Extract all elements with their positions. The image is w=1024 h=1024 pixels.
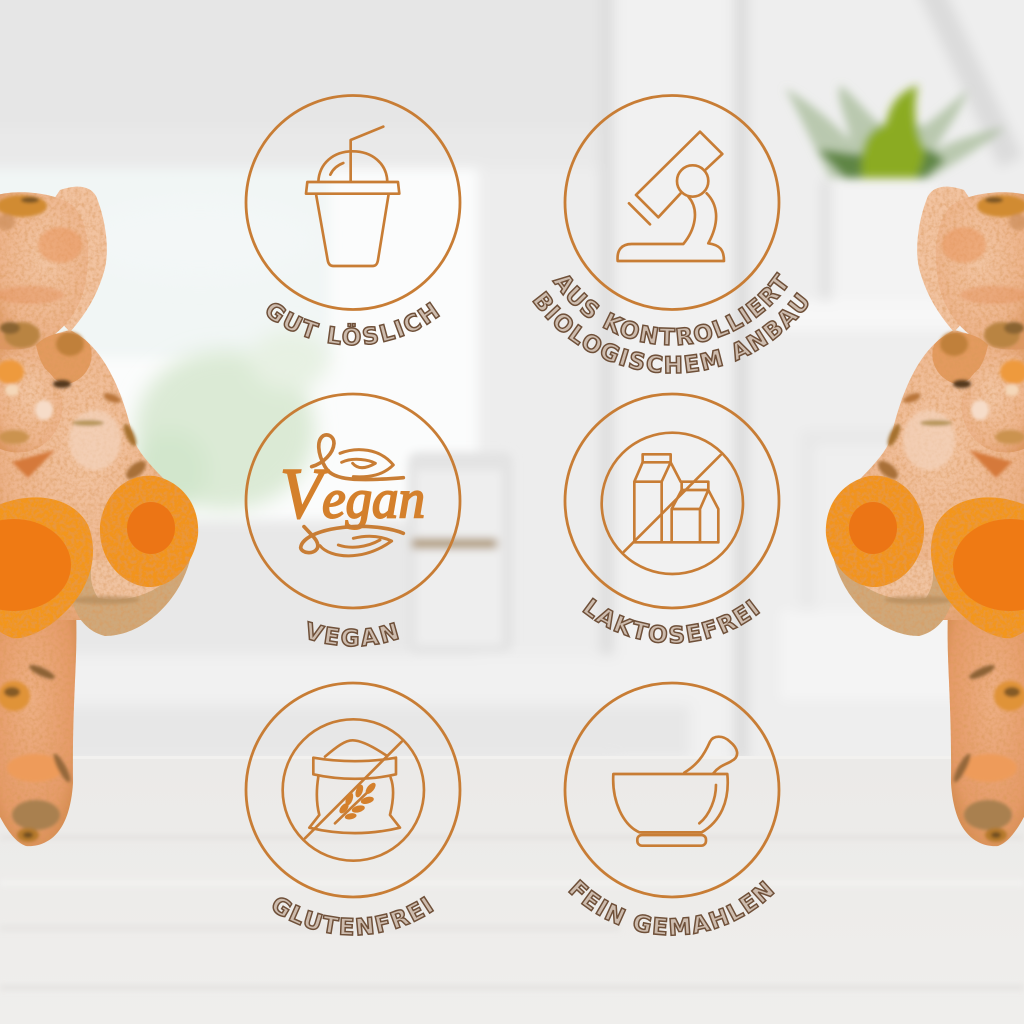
- icon: vegan lettering with leaves: Vegan: [280, 455, 425, 534]
- turmeric root right: [826, 187, 1024, 846]
- label: VEGAN: [307, 620, 400, 648]
- plant: [785, 85, 1005, 178]
- turmeric root left: [0, 187, 198, 846]
- label: LAKTOSEFREI: [582, 597, 760, 644]
- panel: gut löslich: [244, 94, 462, 346]
- panel: vegan: [244, 392, 462, 648]
- icon: mortar and pestle: [613, 737, 737, 846]
- icon: crossed-out flour bag: [283, 719, 424, 861]
- badge ring: [565, 96, 779, 310]
- icon: vegan lettering with leaves: [280, 435, 425, 556]
- jar: [408, 452, 513, 652]
- panel: laktosefrei: [564, 392, 780, 644]
- panel: fein gemahlen: [564, 682, 780, 936]
- icon: microscope: [618, 132, 724, 261]
- label line 2: BIOLOGISCHEM ANBAU: [532, 290, 809, 374]
- panel: glutenfrei: [244, 682, 462, 936]
- label: GLUTENFREI: [272, 896, 434, 936]
- badge ring: [246, 683, 460, 897]
- panel: aus kontrolliert biologischem anbau: [532, 94, 809, 374]
- badge ring: [565, 394, 779, 608]
- badge ring: [246, 394, 460, 608]
- window greenery: [80, 200, 330, 510]
- label line 1: AUS KONTROLLIERT: [551, 271, 788, 346]
- badge ring: [246, 96, 460, 310]
- label: FEIN GEMAHLEN: [568, 878, 775, 936]
- badge ring: [565, 683, 779, 897]
- icon: crossed-out milk cartons: [602, 433, 743, 574]
- label: GUT LÖSLICH: [266, 301, 440, 346]
- icon: cup with straw: [306, 127, 399, 266]
- floor: [0, 756, 1024, 1024]
